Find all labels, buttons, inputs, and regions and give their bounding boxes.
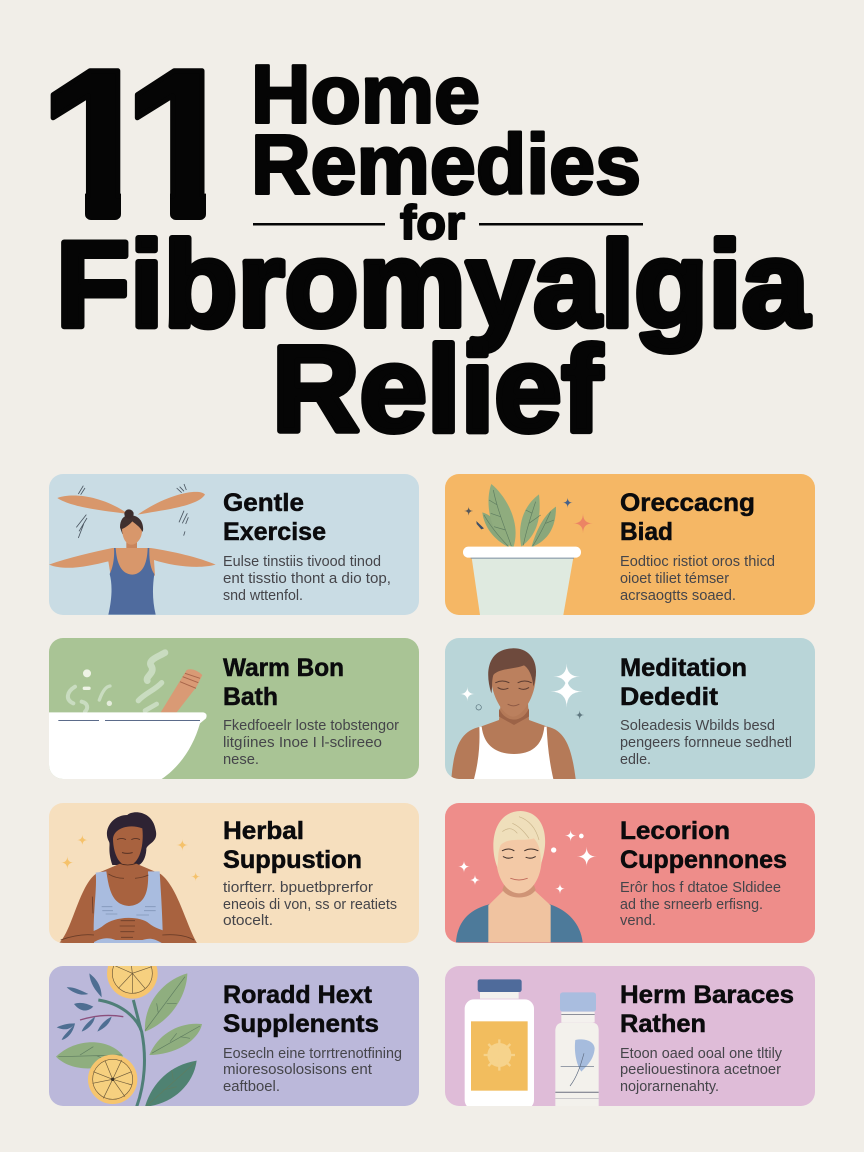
- title word: for: for: [400, 197, 465, 250]
- icon: plant with citrus: [56, 966, 202, 1106]
- panel: lavender supplements: [49, 966, 419, 1106]
- icon: blonde woman with sparkles: [456, 811, 597, 942]
- description: [223, 718, 399, 768]
- description: mioresosolosisons ent: [223, 1062, 372, 1078]
- panel: pink bottles: [445, 966, 815, 1109]
- description: [620, 718, 792, 768]
- panel: herbal: [49, 803, 419, 943]
- description: oioet tiliet témser: [620, 571, 729, 587]
- description: ad the srneerb erfisng.: [620, 897, 763, 913]
- description: snd wttenfol.: [223, 588, 303, 604]
- heading: Herm Baraces: [620, 981, 794, 1009]
- description: [223, 880, 397, 929]
- description: tiorfterr. bpuetbprerfor: [223, 880, 373, 896]
- heading line 2: Bath: [223, 683, 278, 711]
- divider left: [253, 223, 385, 226]
- description: nojorarnenahty.: [620, 1079, 719, 1095]
- description: litgíines Inoe I l-sclireeo: [223, 735, 382, 751]
- description: [620, 1046, 783, 1095]
- panel: orange plant: [445, 474, 815, 615]
- description: acrsaogtts soaed.: [620, 588, 736, 604]
- description: [223, 1046, 402, 1095]
- description: Soleadesis Wbilds besd: [620, 718, 775, 734]
- description: nese.: [223, 752, 259, 768]
- description: pengeers fornneue sedhetl: [620, 735, 792, 751]
- panel: coral: [445, 803, 815, 943]
- heading line 2: Cuppennones: [620, 846, 787, 874]
- description: vend.: [620, 913, 656, 929]
- description: otocelt.: [223, 913, 273, 929]
- description: ent tisstio thont a dio top,: [223, 571, 391, 587]
- description: [620, 880, 781, 929]
- heading line 2: Suppustion: [223, 846, 362, 874]
- icon: woman with clasped hands: [59, 812, 200, 943]
- description: [620, 554, 775, 604]
- description: eaftboel.: [223, 1079, 280, 1095]
- heading: Roradd Hext: [223, 981, 373, 1009]
- description: Eosecln eine torrtrenotfining: [223, 1046, 402, 1062]
- heading: Herbal: [223, 817, 304, 845]
- heading: Warm Bon: [223, 654, 344, 682]
- divider right: [479, 223, 643, 226]
- heading line 2: Biad: [620, 518, 673, 546]
- heading line 2: Dededit: [620, 683, 719, 711]
- description: eneois di von, ss or reatiets: [223, 897, 397, 913]
- icon: woman stretching: [49, 484, 216, 615]
- heading line 2: Exercise: [223, 518, 326, 546]
- icon: meditating woman: [451, 648, 584, 779]
- heading: Gentle: [223, 489, 304, 517]
- title: [50, 64, 813, 435]
- title line: Remedies: Remedies: [251, 118, 641, 212]
- description: Fkedfoeelr loste tobstengor: [223, 718, 399, 734]
- title line: Home: Home: [251, 48, 480, 140]
- title line: Relief: Relief: [272, 321, 602, 457]
- title number 11: 11: [38, 25, 237, 264]
- description: peeliouestinora acetnoer: [620, 1062, 781, 1078]
- description: [223, 554, 391, 604]
- heading line 2: Rathen: [620, 1010, 706, 1038]
- description: Eodtioc ristiot oros thicd: [620, 554, 775, 570]
- icon: bath bowl with steam: [49, 653, 207, 779]
- icon: potted plant: [463, 484, 593, 615]
- panel: warm bath: [49, 638, 419, 779]
- title line: Fibromyalgia: Fibromyalgia: [56, 216, 810, 352]
- heading line 2: Supplenents: [223, 1010, 379, 1038]
- panel: meditation: [445, 638, 815, 779]
- description: Erôr hos f dtatoe Sldidee: [620, 880, 781, 896]
- heading: Meditation: [620, 654, 747, 682]
- heading: Lecorion: [620, 817, 730, 845]
- heading: Oreccacng: [620, 489, 755, 517]
- description: edle.: [620, 752, 651, 768]
- description: Eulse tinstiis tivood tinod: [223, 554, 381, 570]
- panel: gentle exercise: [49, 474, 419, 615]
- description: Etoon oaed ooal one tltily: [620, 1046, 783, 1062]
- icon: supplement bottles: [465, 979, 599, 1109]
